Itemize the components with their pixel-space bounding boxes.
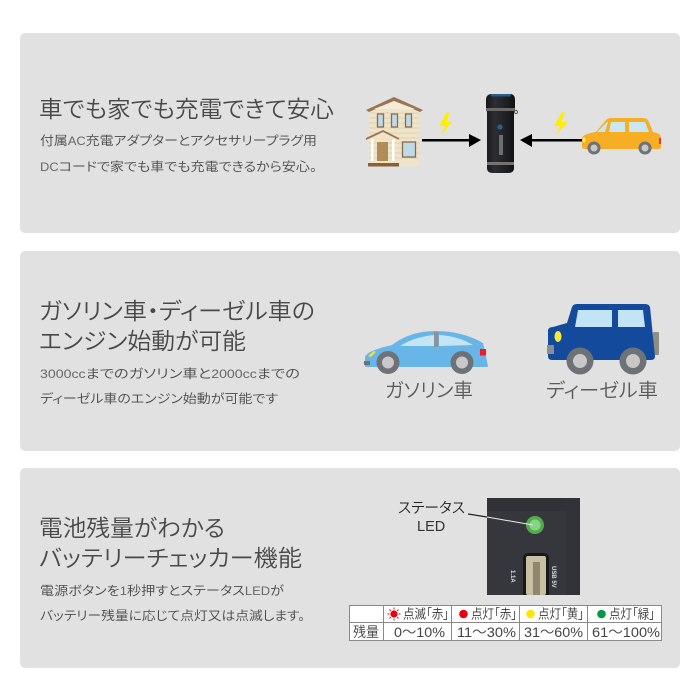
table: remaining battery by LED state: 0～10% — [394, 624, 445, 640]
icon: diesel car — [547, 304, 659, 374]
icon: lightning bolt left — [439, 112, 452, 135]
icon: jump starter device — [486, 94, 518, 173]
icon: blinking red LED — [388, 608, 400, 620]
table: remaining battery by LED state: 11～30% — [457, 624, 516, 640]
table: remaining battery by LED state: 点灯「赤」 — [471, 606, 517, 622]
icon: lightning bolt right — [554, 112, 568, 135]
heading: engine starting — [39, 298, 315, 354]
text block: charging description: 付属AC充電アダプターとアクセサリープラグ用 — [40, 133, 317, 148]
text block: charging description: DCコードで家でも車でも充電できるから安心。 — [40, 160, 317, 174]
heading: charging: 車でも家でも充電できて安心 — [39, 96, 334, 122]
text block: battery checker description: 電源ボタンを 1秒押すとステータス LEDが — [40, 583, 285, 598]
heading: engine starting: エンジン始動が可能 — [39, 328, 246, 354]
heading: battery checker: 電池残量がわかる — [39, 515, 225, 541]
table: remaining battery by LED state: 点灯「黄」 — [538, 606, 584, 622]
label: 1.1A: 1.1A — [509, 570, 515, 583]
text block: engine description — [40, 367, 300, 406]
table: remaining battery by LED state: 61～100% — [592, 624, 660, 640]
table: remaining battery by LED state: 31～60% — [524, 624, 583, 640]
label: status LED callout: ステータス — [398, 500, 465, 517]
panel: battery checker — [20, 468, 680, 668]
icon: house — [366, 97, 423, 166]
label: status LED callout — [398, 500, 533, 535]
label: gasoline car: ガソリン車 — [385, 380, 473, 402]
icon: yellow LED — [526, 610, 535, 618]
heading: battery checker: バッテリーチェッカー機能 — [39, 545, 302, 571]
icon: orange car — [582, 118, 661, 154]
text block: engine description: ディーゼル車のエンジン始動が可能です — [40, 391, 278, 406]
table: remaining battery by LED state: 残量 — [353, 624, 379, 640]
table: remaining battery by LED state — [350, 606, 662, 640]
label: diesel car: ディーゼル車 — [546, 380, 658, 402]
icon: gasoline car — [364, 331, 488, 374]
text block: battery checker description — [40, 583, 305, 623]
table: remaining battery by LED state: 点滅「赤」 — [403, 606, 449, 622]
text block: charging description — [40, 133, 317, 174]
heading: engine starting: ガソリン車・ディーゼル車の — [39, 298, 315, 324]
table: remaining battery by LED state: 点灯「緑」 — [609, 606, 655, 622]
photo: device close-up with status LED and USB port — [487, 498, 580, 595]
text block: engine description: 3000cc までのガソリン車と 2000cc までの — [40, 367, 300, 381]
text block: battery checker description: バッテリー残量に応じて点灯又は点滅します。 — [40, 609, 305, 623]
label: status LED callout: LED — [417, 519, 445, 535]
arrow: house to battery — [422, 134, 481, 147]
arrow: car to battery — [520, 134, 583, 147]
heading: battery checker — [39, 515, 302, 571]
icon: green LED — [597, 610, 606, 618]
panel: charging at home or in car — [20, 33, 680, 233]
label: USB 5V: USB 5V — [550, 566, 556, 588]
panel: engine starting — [20, 251, 680, 451]
icon: red LED — [459, 610, 468, 618]
